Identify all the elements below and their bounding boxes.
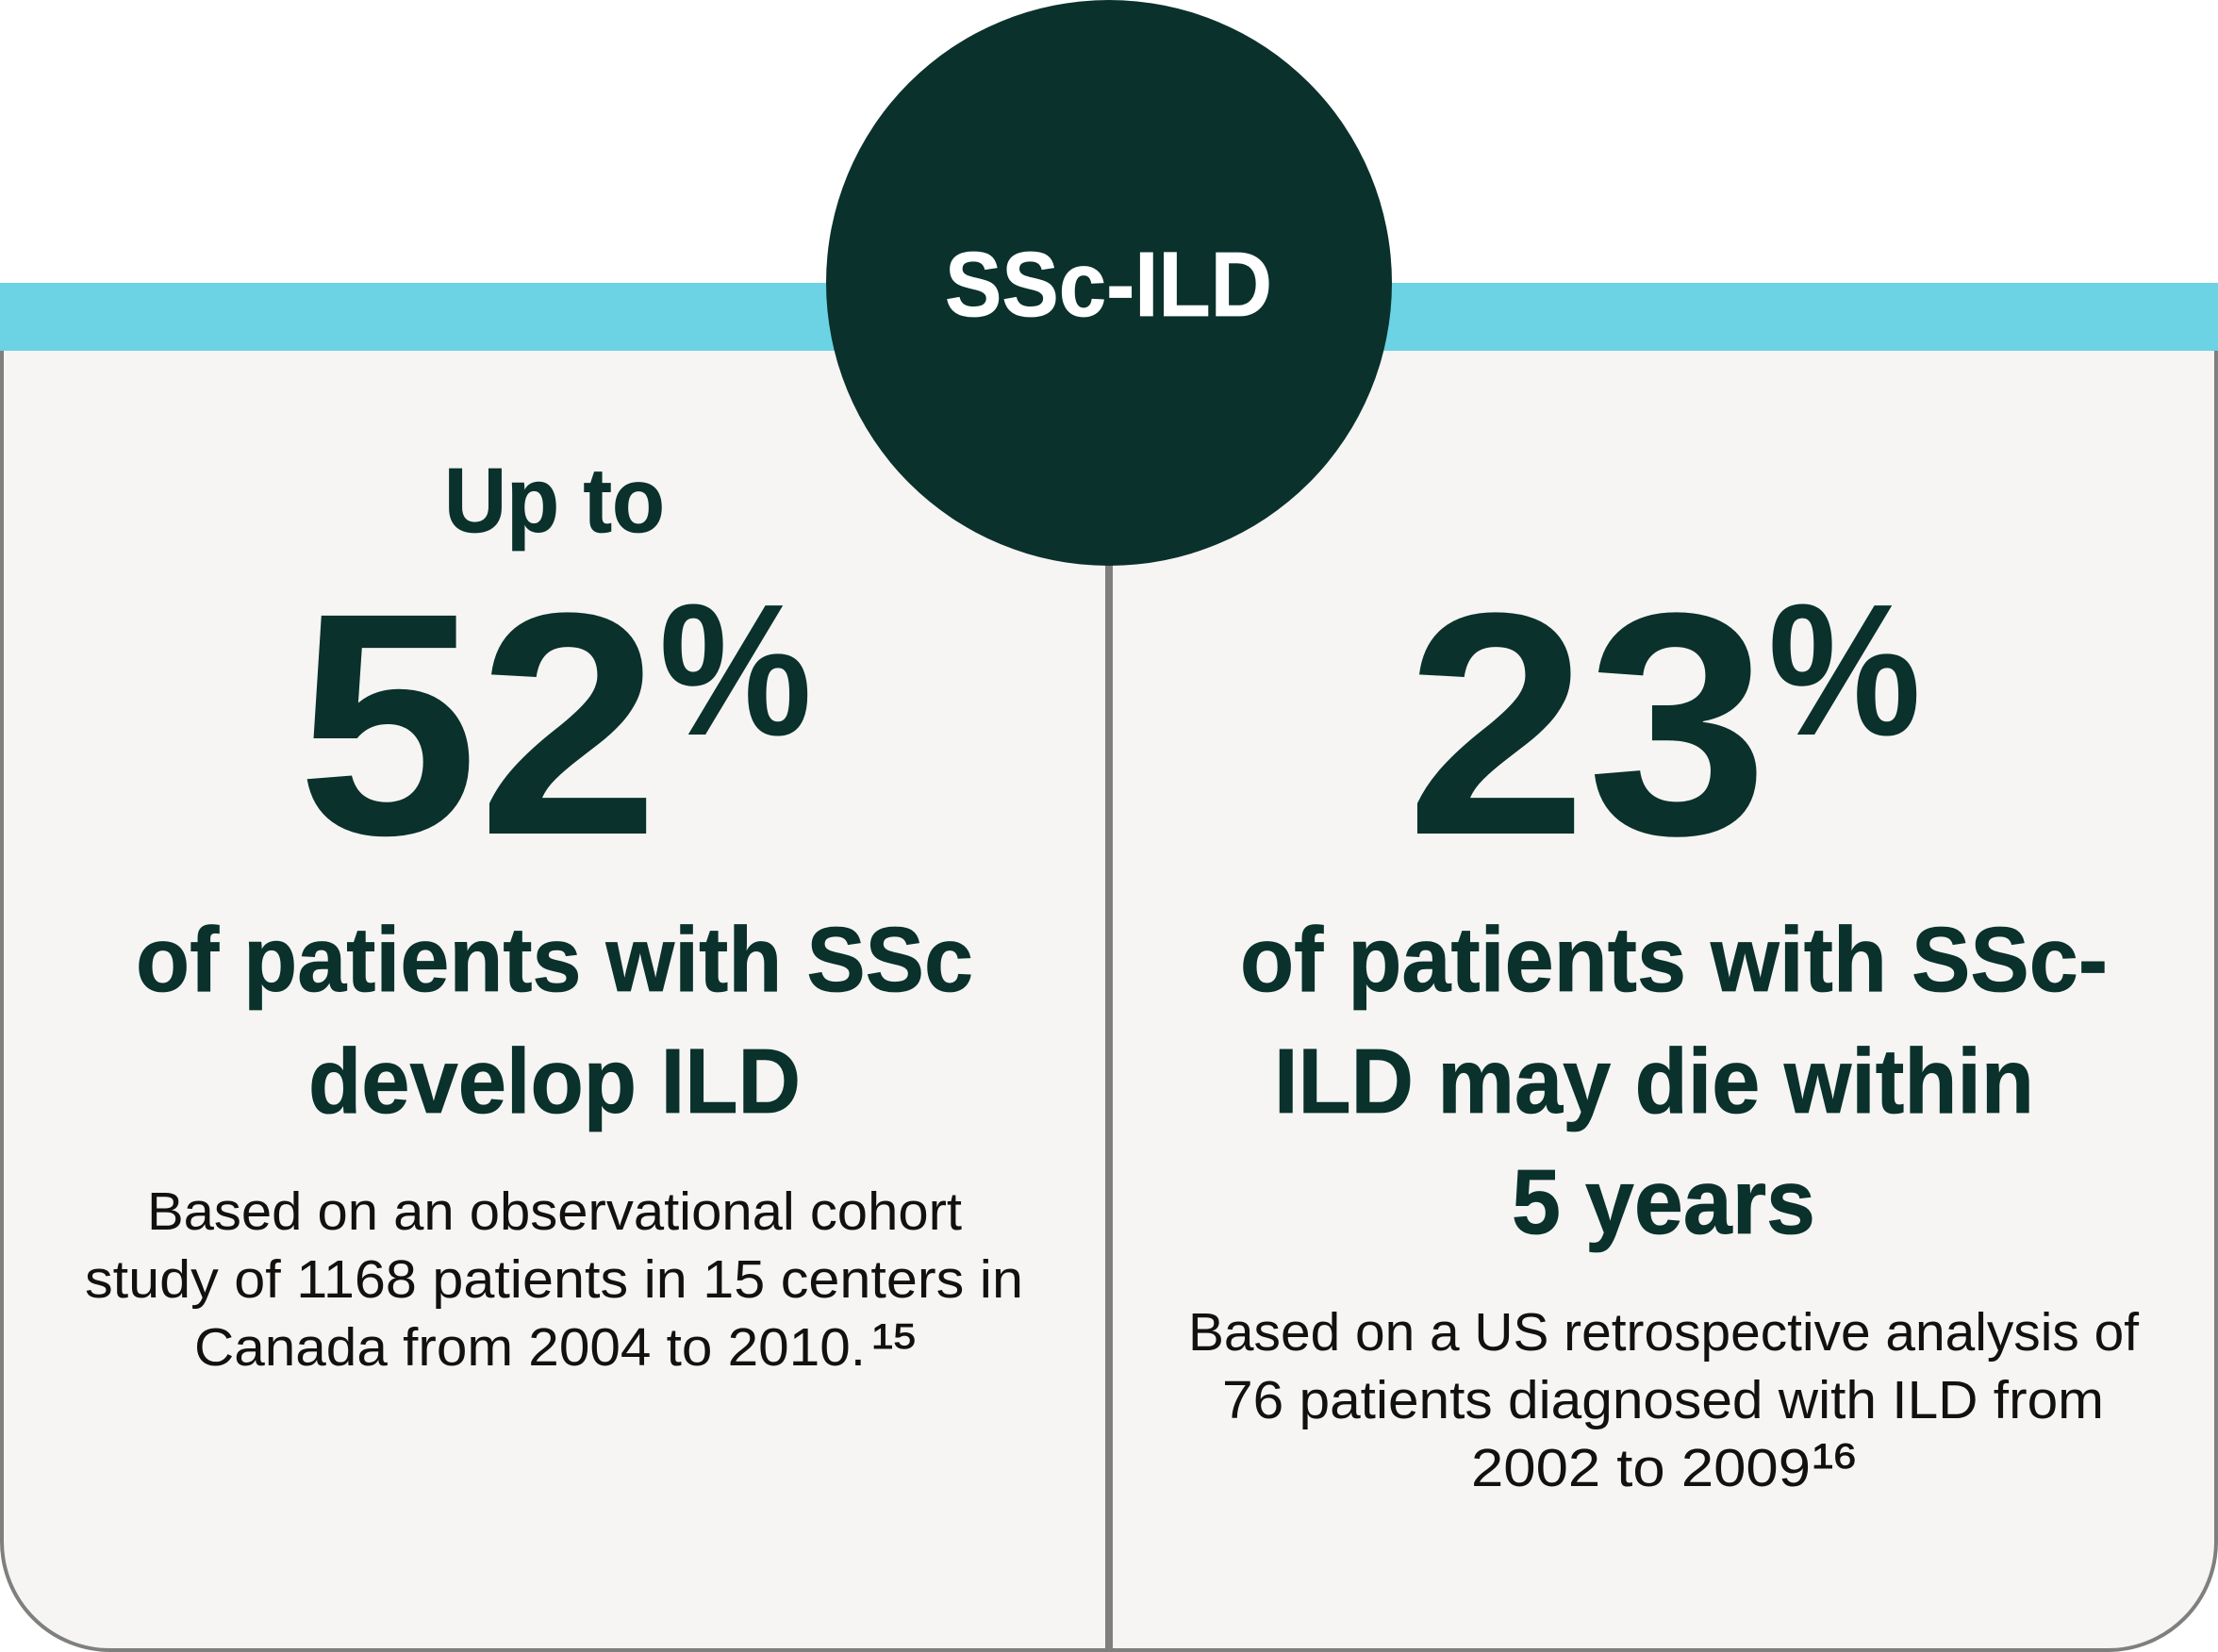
panel: left column, SSc patients developing ILD [85,449,1023,1378]
header circle badge [826,0,1392,566]
statistic description [136,908,973,1132]
lead-in text: Up to [444,449,665,552]
study note: 16 [1812,1437,1856,1476]
statistic: 52%: 52 [297,548,659,901]
statistic: 23%: 23 [1406,548,1768,901]
statistic description: 5 years [1512,1150,1815,1253]
study note: Based on an observational cohort [147,1181,962,1242]
divider between columns [1105,556,1113,1652]
panel: background card [2,351,2216,1650]
study note: Canada from 2004 to 2010. [194,1317,866,1378]
study note [85,1181,1023,1378]
header band [0,283,2218,351]
study note: 2002 to 2009 [1471,1438,1811,1498]
statistic description: develop ILD [308,1030,801,1132]
statistic: 23%: % [1768,566,1921,775]
study note: 76 patients diagnosed with ILD from [1222,1370,2104,1430]
study note: study of 1168 patients in 15 centers in [85,1249,1023,1310]
statistic description [1240,908,2108,1253]
statistic: 23% [1406,548,1921,901]
study note: 15 [871,1317,916,1356]
study note [1188,1302,2139,1498]
panel: right column, SSc-ILD mortality [1188,548,2139,1498]
statistic description: of patients with SSc [136,908,973,1011]
study note: Based on a US retrospective analysis of [1188,1302,2139,1363]
statistic description: of patients with SSc- [1240,908,2108,1011]
statistic: 52%: % [659,566,812,775]
statistic description: ILD may die within [1274,1030,2034,1132]
header circle badge: SSc-ILD [945,233,1272,336]
statistic: 52% [297,548,812,901]
